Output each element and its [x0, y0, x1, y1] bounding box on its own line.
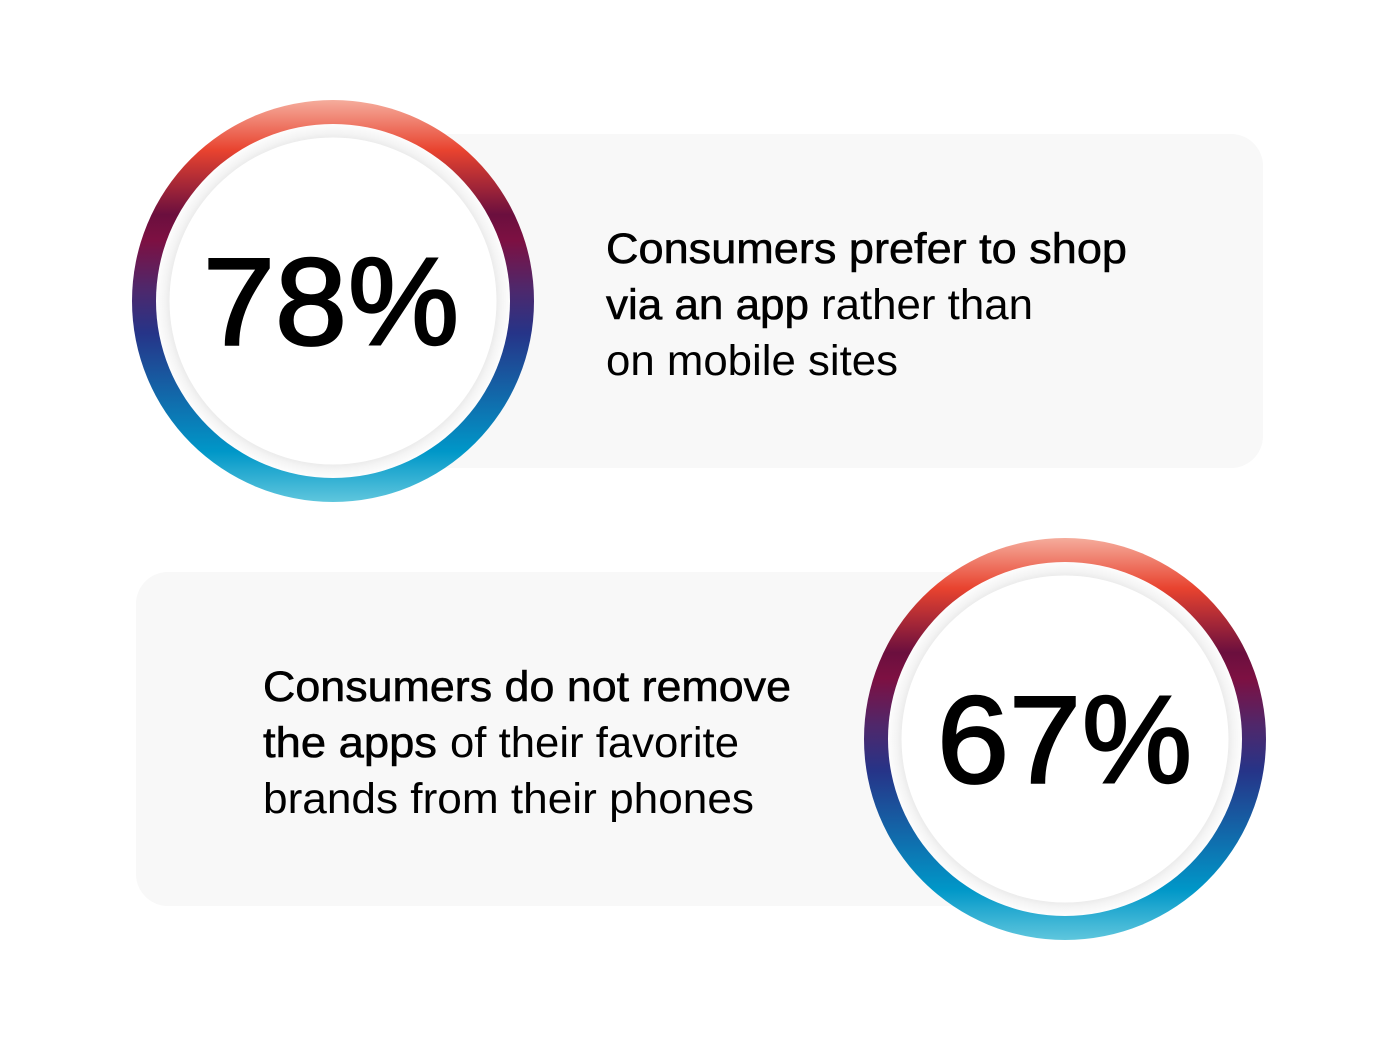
text block: app preference: on mobile sites	[606, 338, 898, 385]
number: 78%: 78	[203, 234, 347, 372]
panel: 67% statistic card	[136, 572, 1066, 906]
number: 67%	[937, 672, 1192, 810]
text block: app retention: of their favorite	[450, 720, 739, 767]
text block: app preference: Consumers prefer to shop	[606, 226, 1127, 273]
number: 78%: %	[348, 234, 459, 372]
badge: 78% gradient ring	[132, 100, 534, 502]
text block: app preference: rather than	[821, 282, 1033, 329]
panel: 78% statistic card	[333, 134, 1263, 468]
text block: app retention: the apps	[263, 720, 437, 767]
number: 78%	[203, 234, 459, 372]
number: 67%: 67	[937, 672, 1081, 810]
text block: app retention: brands from their phones	[263, 776, 754, 823]
badge: 67% gradient ring	[864, 538, 1266, 940]
text block: app retention	[263, 664, 791, 823]
number: 67%: %	[1082, 672, 1192, 810]
text block: app retention: Consumers do not remove	[263, 664, 791, 711]
text block: app preference: via an app	[606, 282, 809, 329]
text block: app preference	[606, 226, 1127, 385]
